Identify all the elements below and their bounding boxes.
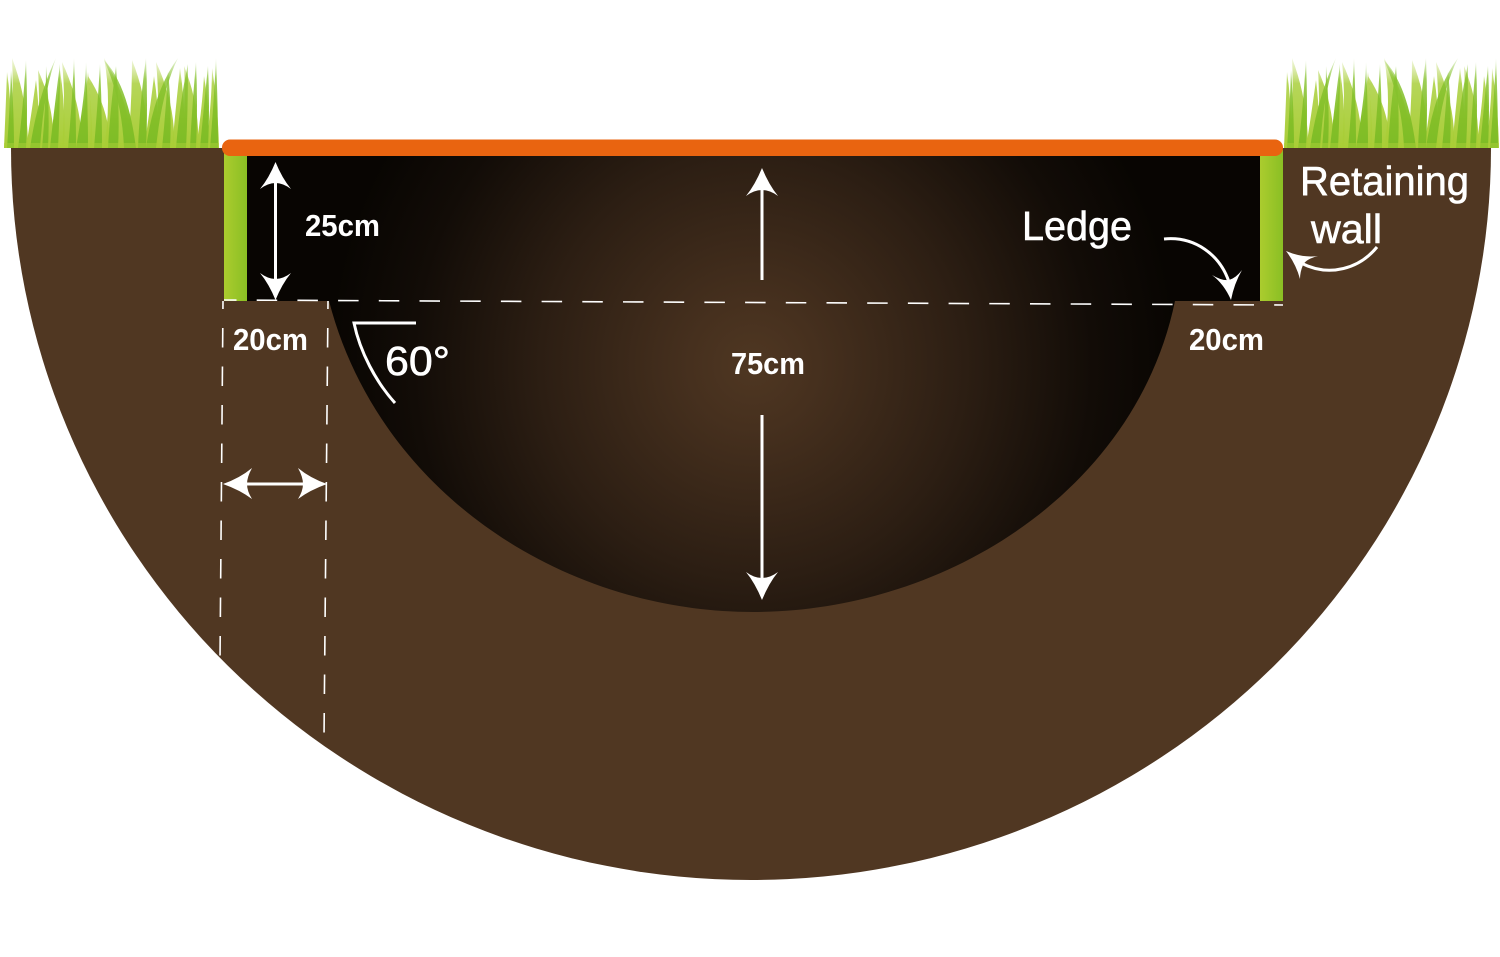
- label: 60 degrees: 60°: [385, 338, 450, 384]
- label: Retaining wall: [1300, 158, 1469, 252]
- label: 75cm: 75cm: [731, 346, 805, 381]
- label: 25cm: 25cm: [305, 208, 380, 243]
- arrow: ledge pointer: [1164, 239, 1242, 300]
- arrow: up to surface: [746, 168, 778, 280]
- label: Retaining wall: wall: [1310, 206, 1382, 252]
- soil mound: [11, 148, 1491, 880]
- right retaining wall: [1260, 150, 1283, 301]
- arrow: 25cm height: [260, 162, 291, 300]
- label: left 20cm: 20cm: [233, 322, 308, 357]
- left retaining wall: [224, 150, 247, 301]
- arrow: down to pit floor: [746, 415, 778, 600]
- dashed guide lines: [220, 300, 1283, 738]
- pit void: [247, 152, 1260, 612]
- label: right 20cm: 20cm: [1189, 322, 1264, 357]
- arrow: 20cm width: [223, 468, 327, 499]
- angle marker: [354, 323, 416, 403]
- orange cover: [222, 140, 1283, 156]
- arrow: retaining wall pointer: [1286, 247, 1377, 279]
- right grass: [1284, 58, 1499, 148]
- label: Retaining wall: Retaining: [1300, 158, 1469, 204]
- label: Ledge: Ledge: [1022, 203, 1132, 249]
- left grass: [4, 58, 219, 148]
